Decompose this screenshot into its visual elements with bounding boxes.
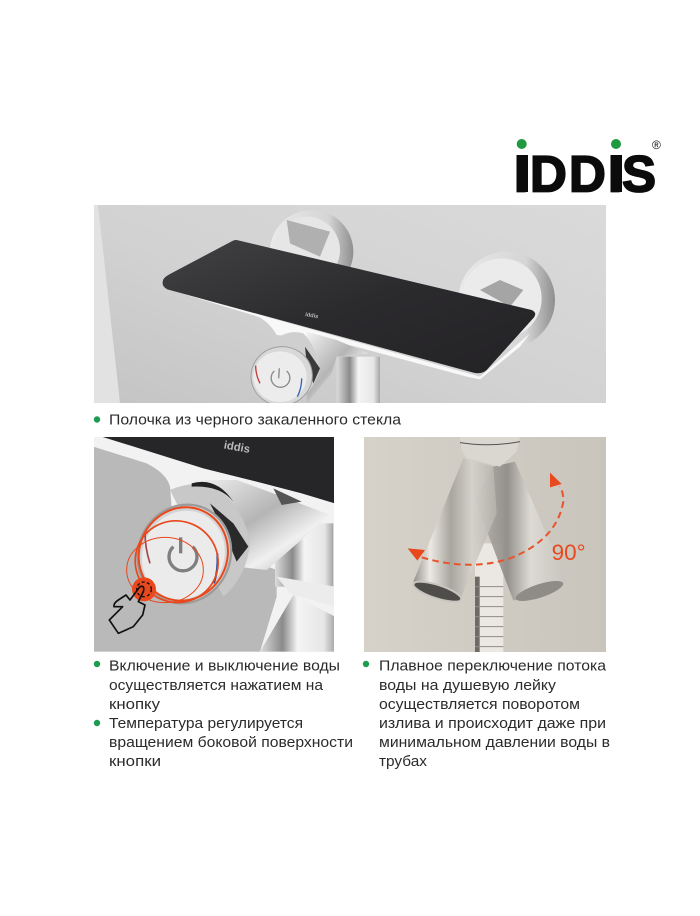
text block: button and temperature bullets: Включение и выключение воды: [109, 658, 340, 674]
glass shelf: [163, 240, 535, 373]
knob: [250, 332, 368, 403]
bullet caption: shelf: Полочка из черного закаленного стекла: [109, 412, 402, 428]
text block: spout bullet: воды на душевую лейку: [379, 677, 557, 694]
text block: spout bullet: минимальном давлении воды в: [379, 734, 610, 751]
logo: IDDIS: ®: [652, 138, 661, 152]
photo: black glass shelf on mixer: [94, 205, 606, 410]
button face: [136, 504, 232, 604]
text block: spout bullet: трубах: [379, 753, 428, 770]
rotation arc: [422, 487, 563, 565]
text block: spout bullet: осуществляется поворотом: [379, 696, 580, 713]
press point: [132, 577, 156, 601]
photo: swivel spout 90 degrees: [364, 437, 606, 653]
hose: [475, 543, 503, 653]
photo: black glass shelf on mixer: iddis: [305, 312, 319, 320]
pipe: [275, 523, 333, 587]
arrowheads: [408, 548, 425, 561]
logo: IDDIS: IDDIS: [514, 146, 656, 202]
orange press rings: [126, 506, 229, 604]
text block: spout bullet: излива и происходит даже при: [379, 715, 606, 732]
hand icon: [109, 586, 145, 633]
right spout: [488, 462, 549, 600]
wall rosette right: [458, 252, 555, 348]
left spout: [413, 458, 497, 600]
wall rosette left: [270, 211, 354, 267]
text block: spout bullet: Плавное переключение потока: [379, 658, 607, 674]
power icon: [169, 547, 197, 571]
photo: push button knob: [93, 437, 337, 652]
text block: button and temperature bullets: вращением боковой поверхности: [109, 734, 353, 751]
pipe below: [337, 357, 380, 405]
trunk: [460, 437, 520, 467]
body: [204, 480, 326, 570]
text block: button and temperature bullets: кнопки: [109, 753, 161, 770]
text block: spout bullet: [363, 658, 610, 770]
photo: push button knob: iddis: [223, 439, 251, 456]
text block: button and temperature bullets: осуществляется нажатием на: [109, 677, 324, 694]
knurled side: [170, 482, 250, 597]
90 degree label: 90°: [552, 540, 586, 565]
shelf glass: [102, 437, 337, 504]
white shelf base: [165, 288, 530, 379]
text block: button and temperature bullets: Температура регулируется: [109, 715, 303, 732]
text block: button and temperature bullets: кнопку: [109, 696, 161, 713]
text block: button and temperature bullets: [94, 658, 353, 770]
